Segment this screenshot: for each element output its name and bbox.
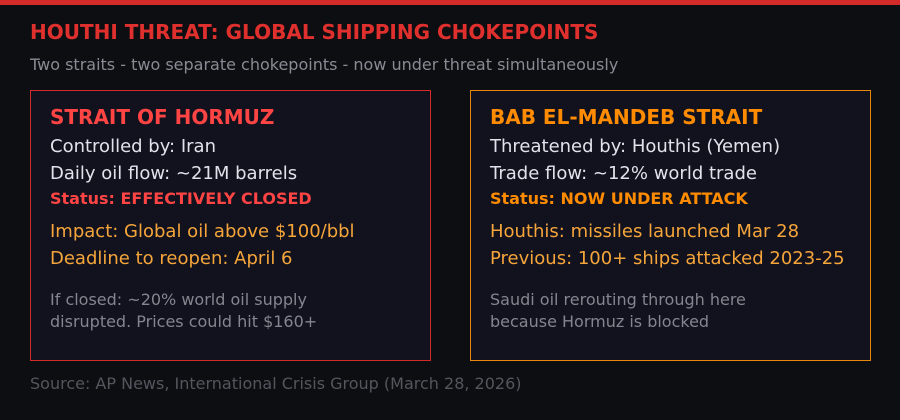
facts: Bab el-Mandeb: Trade flow: ~12% world trade	[489, 163, 757, 184]
impact: Bab el-Mandeb: Houthis: missiles launched Mar 28	[490, 221, 799, 242]
status: Bab el-Mandeb: Status: NOW UNDER ATTACK	[490, 189, 748, 208]
heading: Bab el-Mandeb: BAB EL-MANDEB STRAIT	[490, 105, 763, 129]
facts: Bab el-Mandeb: Threatened by: Houthis (Yemen)	[489, 136, 780, 157]
subtitle: Two straits - two separate chokepoints - now under threat simultaneously	[29, 55, 618, 74]
impact: Hormuz: Impact: Global oil above $100/bbl	[50, 221, 355, 242]
impact: Bab el-Mandeb	[490, 221, 845, 269]
heading: Hormuz: STRAIT OF HORMUZ	[50, 105, 274, 129]
note: Hormuz	[50, 290, 317, 331]
panel: Strait of Hormuz	[30, 90, 430, 360]
facts: Hormuz: Daily oil flow: ~21M barrels	[50, 163, 297, 184]
note: Bab el-Mandeb	[490, 290, 746, 331]
note: Bab el-Mandeb: because Hormuz is blocked	[490, 312, 709, 331]
impact: Hormuz: Deadline to reopen: April 6	[50, 248, 292, 269]
impact: Hormuz	[50, 221, 355, 269]
note: Hormuz: If closed: ~20% world oil supply	[50, 290, 307, 309]
panel: Bab el-Mandeb	[470, 90, 870, 360]
top accent bar	[0, 0, 900, 5]
note: Bab el-Mandeb: Saudi oil rerouting through here	[490, 290, 746, 309]
note: Hormuz: disrupted. Prices could hit $160+	[50, 312, 317, 331]
impact: Bab el-Mandeb: Previous: 100+ ships attacked 2023-25	[490, 248, 845, 269]
source: Source: AP News, International Crisis Group (March 28, 2026)	[30, 374, 522, 393]
status: Hormuz: Status: EFFECTIVELY CLOSED	[50, 189, 312, 208]
facts: Bab el-Mandeb	[489, 136, 780, 184]
facts: Hormuz	[50, 136, 297, 184]
facts: Hormuz: Controlled by: Iran	[50, 136, 216, 157]
title: HOUTHI THREAT: GLOBAL SHIPPING CHOKEPOINTS	[30, 20, 598, 44]
